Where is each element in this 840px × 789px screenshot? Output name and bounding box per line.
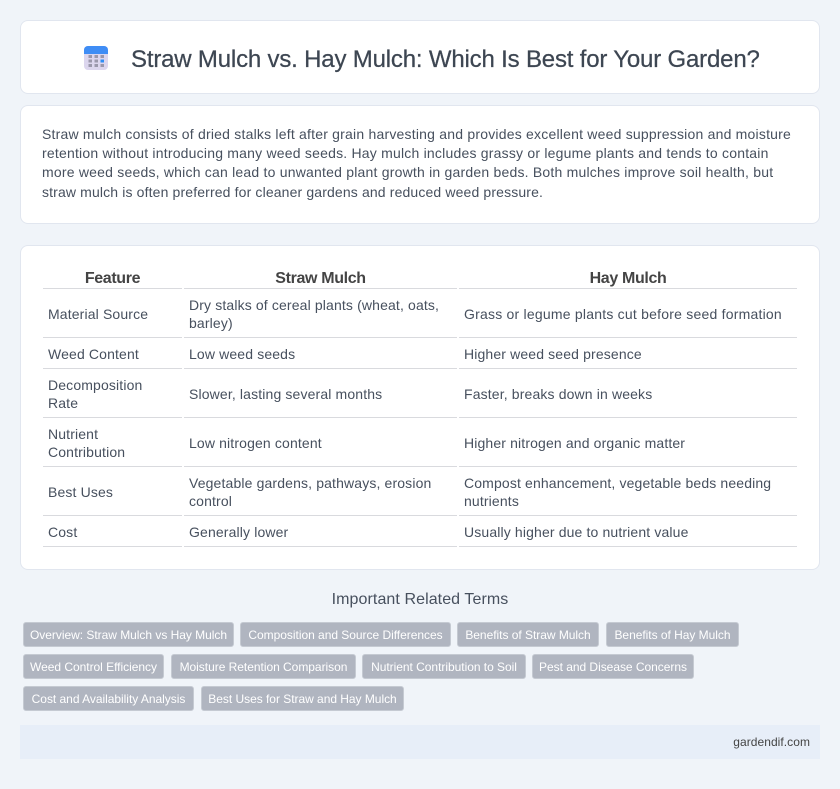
row: best uses: control xyxy=(189,493,232,509)
row: decomposition rate: Slower, lasting several months xyxy=(189,386,382,402)
related terms tags: Benefits of Hay Mulch xyxy=(614,628,731,642)
intro text: more weed seeds, which can lead to unwanted plant growth in garden beds. Both mulches improve soil health, but xyxy=(42,164,773,180)
title panel xyxy=(20,20,820,94)
related terms tags: Best Uses for Straw and Hay Mulch xyxy=(208,692,397,706)
row: cost: Generally lower xyxy=(189,524,288,540)
row: decomposition rate xyxy=(48,377,652,411)
related terms tags: Nutrient Contribution to Soil xyxy=(371,660,517,674)
row: weed content: Higher weed seed presence xyxy=(464,346,642,362)
row: decomposition rate: Faster, breaks down in weeks xyxy=(464,386,652,402)
related terms tags: Pest and Disease Concerns xyxy=(539,660,687,674)
row: material source: Material Source xyxy=(48,306,148,322)
row: nutrient contribution: Higher nitrogen and organic matter xyxy=(464,435,685,451)
intro text xyxy=(42,126,791,200)
row: material source: Grass or legume plants cut before seed formation xyxy=(464,306,782,322)
panel: intro xyxy=(20,105,820,224)
footer bar xyxy=(20,725,820,759)
table rules xyxy=(43,288,797,547)
row: cost xyxy=(48,524,689,540)
row: nutrient contribution: Low nitrogen content xyxy=(189,435,322,451)
row: best uses xyxy=(48,475,771,509)
row: material source: barley) xyxy=(189,315,233,331)
table header: Hay Mulch xyxy=(590,270,666,287)
related terms tags: Cost and Availability Analysis xyxy=(32,692,185,706)
panel: comparison table xyxy=(20,245,820,570)
row: decomposition rate: Decomposition xyxy=(48,377,142,393)
row: nutrient contribution xyxy=(48,426,685,460)
intro text: retention without introducing many weed seeds. Hay mulch includes grassy or legume plants and tends to contain xyxy=(42,145,769,161)
row: material source: Dry stalks of cereal plants (wheat, oats, xyxy=(189,297,439,313)
row: cost: Usually higher due to nutrient value xyxy=(464,524,689,540)
table header: Feature xyxy=(85,270,140,287)
icon: calendar xyxy=(84,46,108,70)
source credit: gardendif.com xyxy=(733,735,810,749)
intro text: straw mulch is often preferred for cleaner gardens and reduced weed pressure. xyxy=(42,184,543,200)
row: best uses: Compost enhancement, vegetable beds needing xyxy=(464,475,771,491)
row: cost: Cost xyxy=(48,524,77,540)
related terms tags xyxy=(23,622,739,711)
row: material source xyxy=(48,297,782,331)
related terms tags: Weed Control Efficiency xyxy=(30,660,157,674)
related terms tags: Moisture Retention Comparison xyxy=(180,660,347,674)
row: nutrient contribution: Contribution xyxy=(48,444,125,460)
related terms tags: Composition and Source Differences xyxy=(248,628,443,642)
row: weed content: Low weed seeds xyxy=(189,346,295,362)
row: best uses: Vegetable gardens, pathways, erosion xyxy=(189,475,431,491)
row: weed content: Weed Content xyxy=(48,346,139,362)
row: best uses: Best Uses xyxy=(48,484,113,500)
row: nutrient contribution: Nutrient xyxy=(48,426,98,442)
intro text: Straw mulch consists of dried stalks left after grain harvesting and provides excellent weed suppression and moisture xyxy=(42,126,791,142)
row: best uses: nutrients xyxy=(464,493,519,509)
table header xyxy=(85,270,666,287)
row: decomposition rate: Rate xyxy=(48,395,78,411)
table header: Straw Mulch xyxy=(275,270,366,287)
related terms tags: Overview: Straw Mulch vs Hay Mulch xyxy=(30,628,227,642)
related terms tags: Benefits of Straw Mulch xyxy=(465,628,591,642)
row: weed content xyxy=(48,346,642,362)
heading: related terms: Important Related Terms xyxy=(332,591,508,608)
title: Straw Mulch vs. Hay Mulch: Which Is Best for Your Garden? xyxy=(131,46,760,73)
